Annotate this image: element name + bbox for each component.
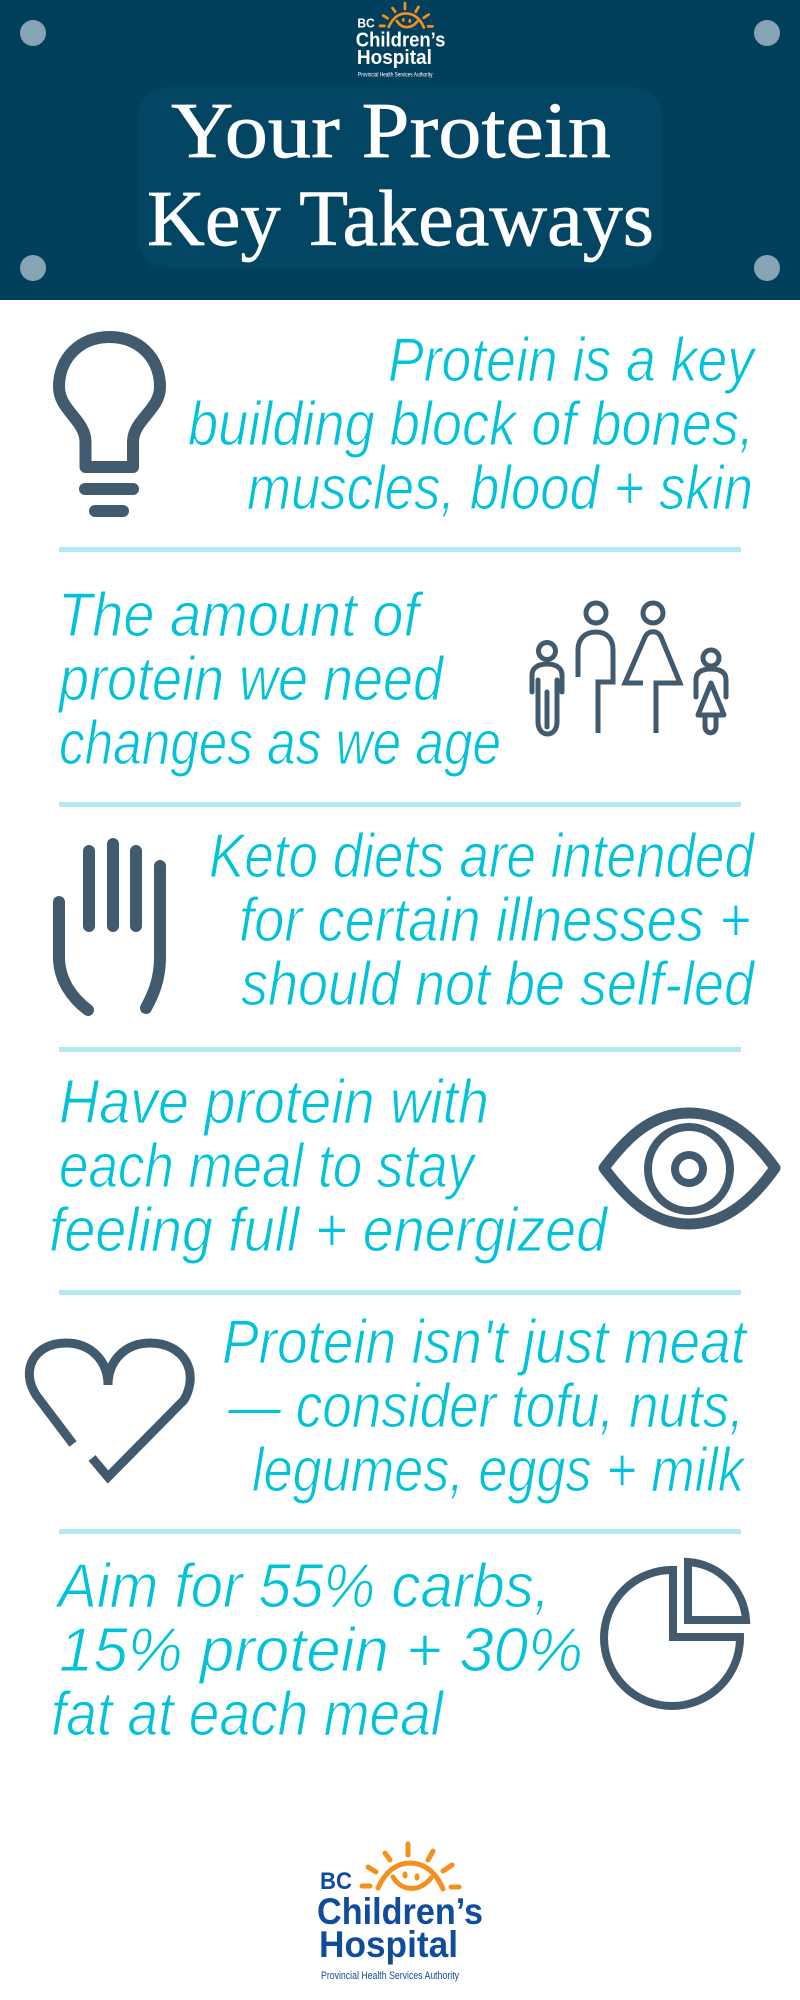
- logo: footer: BC: [320, 1868, 352, 1895]
- logo: header: [356, 3, 445, 79]
- icon: family: [532, 603, 726, 734]
- header banner: [0, 0, 800, 300]
- text: protein sources: [222, 1308, 748, 1505]
- text: changes as we age: [57, 581, 501, 778]
- text: building block: [188, 326, 757, 523]
- text: each meal: feeling full + energized: [49, 1196, 609, 1265]
- text: macronutrient ratio: fat at each meal: [51, 1680, 445, 1749]
- text: each meal: Have protein with: [59, 1068, 489, 1137]
- title: Key Takeaways: [147, 176, 654, 263]
- icon: pie chart: [604, 1562, 746, 1706]
- text: changes as we age: The amount of: [58, 581, 424, 650]
- text: macronutrient ratio: [51, 1552, 583, 1749]
- logo: footer: Hospital: [319, 1924, 458, 1965]
- logo: header: Children’s: [356, 29, 445, 51]
- logo: footer: Children’s: [317, 1891, 483, 1932]
- icon: hand: [59, 844, 160, 1010]
- text: keto diets: [209, 822, 756, 1019]
- text: each meal: each meal to stay: [59, 1132, 477, 1201]
- text: macronutrient ratio: Aim for 55% carbs,: [54, 1552, 550, 1621]
- icon: eye: [604, 1113, 775, 1224]
- title panel: [138, 87, 662, 268]
- corner dots: [20, 20, 780, 281]
- item 4: protein with each meal: [49, 1068, 775, 1265]
- icon: heart with check: [29, 1343, 190, 1477]
- item 3: keto diets: [59, 822, 756, 1019]
- logo: header: BC: [357, 15, 375, 30]
- text: macronutrient ratio: 15% protein + 30%: [59, 1616, 583, 1685]
- item 1: protein building block: [59, 326, 757, 523]
- item 5: protein sources: [29, 1308, 748, 1505]
- item 6: macronutrient ratio: [51, 1552, 746, 1749]
- title: [147, 88, 654, 263]
- text: changes as we age: protein we need: [57, 645, 445, 714]
- item 2: protein need changes with age: [57, 581, 726, 778]
- text: building block: Protein is a key: [388, 326, 757, 395]
- text: protein sources: Protein isn't just meat: [222, 1308, 748, 1377]
- title: Your Protein: [171, 88, 611, 175]
- logo: footer: [317, 1844, 483, 1982]
- logo: header: Provincial Health Services Authority: [358, 73, 432, 79]
- text: each meal: [49, 1068, 609, 1265]
- icon: light bulb: [59, 337, 160, 511]
- text: changes as we age: changes as we age: [59, 709, 501, 778]
- logo: header: Hospital: [357, 47, 432, 69]
- logo: footer: Provincial Health Services Authority: [321, 1970, 459, 1982]
